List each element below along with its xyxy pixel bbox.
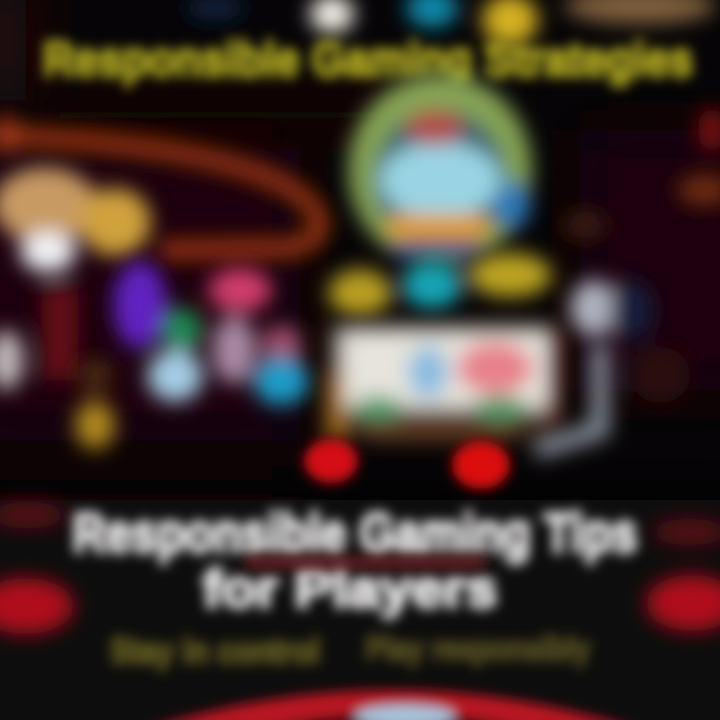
bottom red arc xyxy=(145,690,640,720)
main title xyxy=(72,501,638,619)
machine reels xyxy=(326,322,562,440)
machine arch xyxy=(348,74,532,266)
red side ribbons xyxy=(0,502,720,634)
subtitle left: Stay in control xyxy=(110,630,320,671)
machine shoulders xyxy=(328,253,552,317)
left gold lights xyxy=(0,167,151,390)
main title: for Players xyxy=(202,559,498,619)
slot machine xyxy=(304,74,562,489)
red underline accent xyxy=(245,558,485,567)
right side figure xyxy=(535,211,690,450)
left orange arc xyxy=(0,108,720,250)
machine red buttons xyxy=(304,439,510,489)
subtitle right: Play responsibly xyxy=(366,630,591,668)
left coloured reels and chips xyxy=(75,261,309,449)
top decorations xyxy=(185,0,716,46)
